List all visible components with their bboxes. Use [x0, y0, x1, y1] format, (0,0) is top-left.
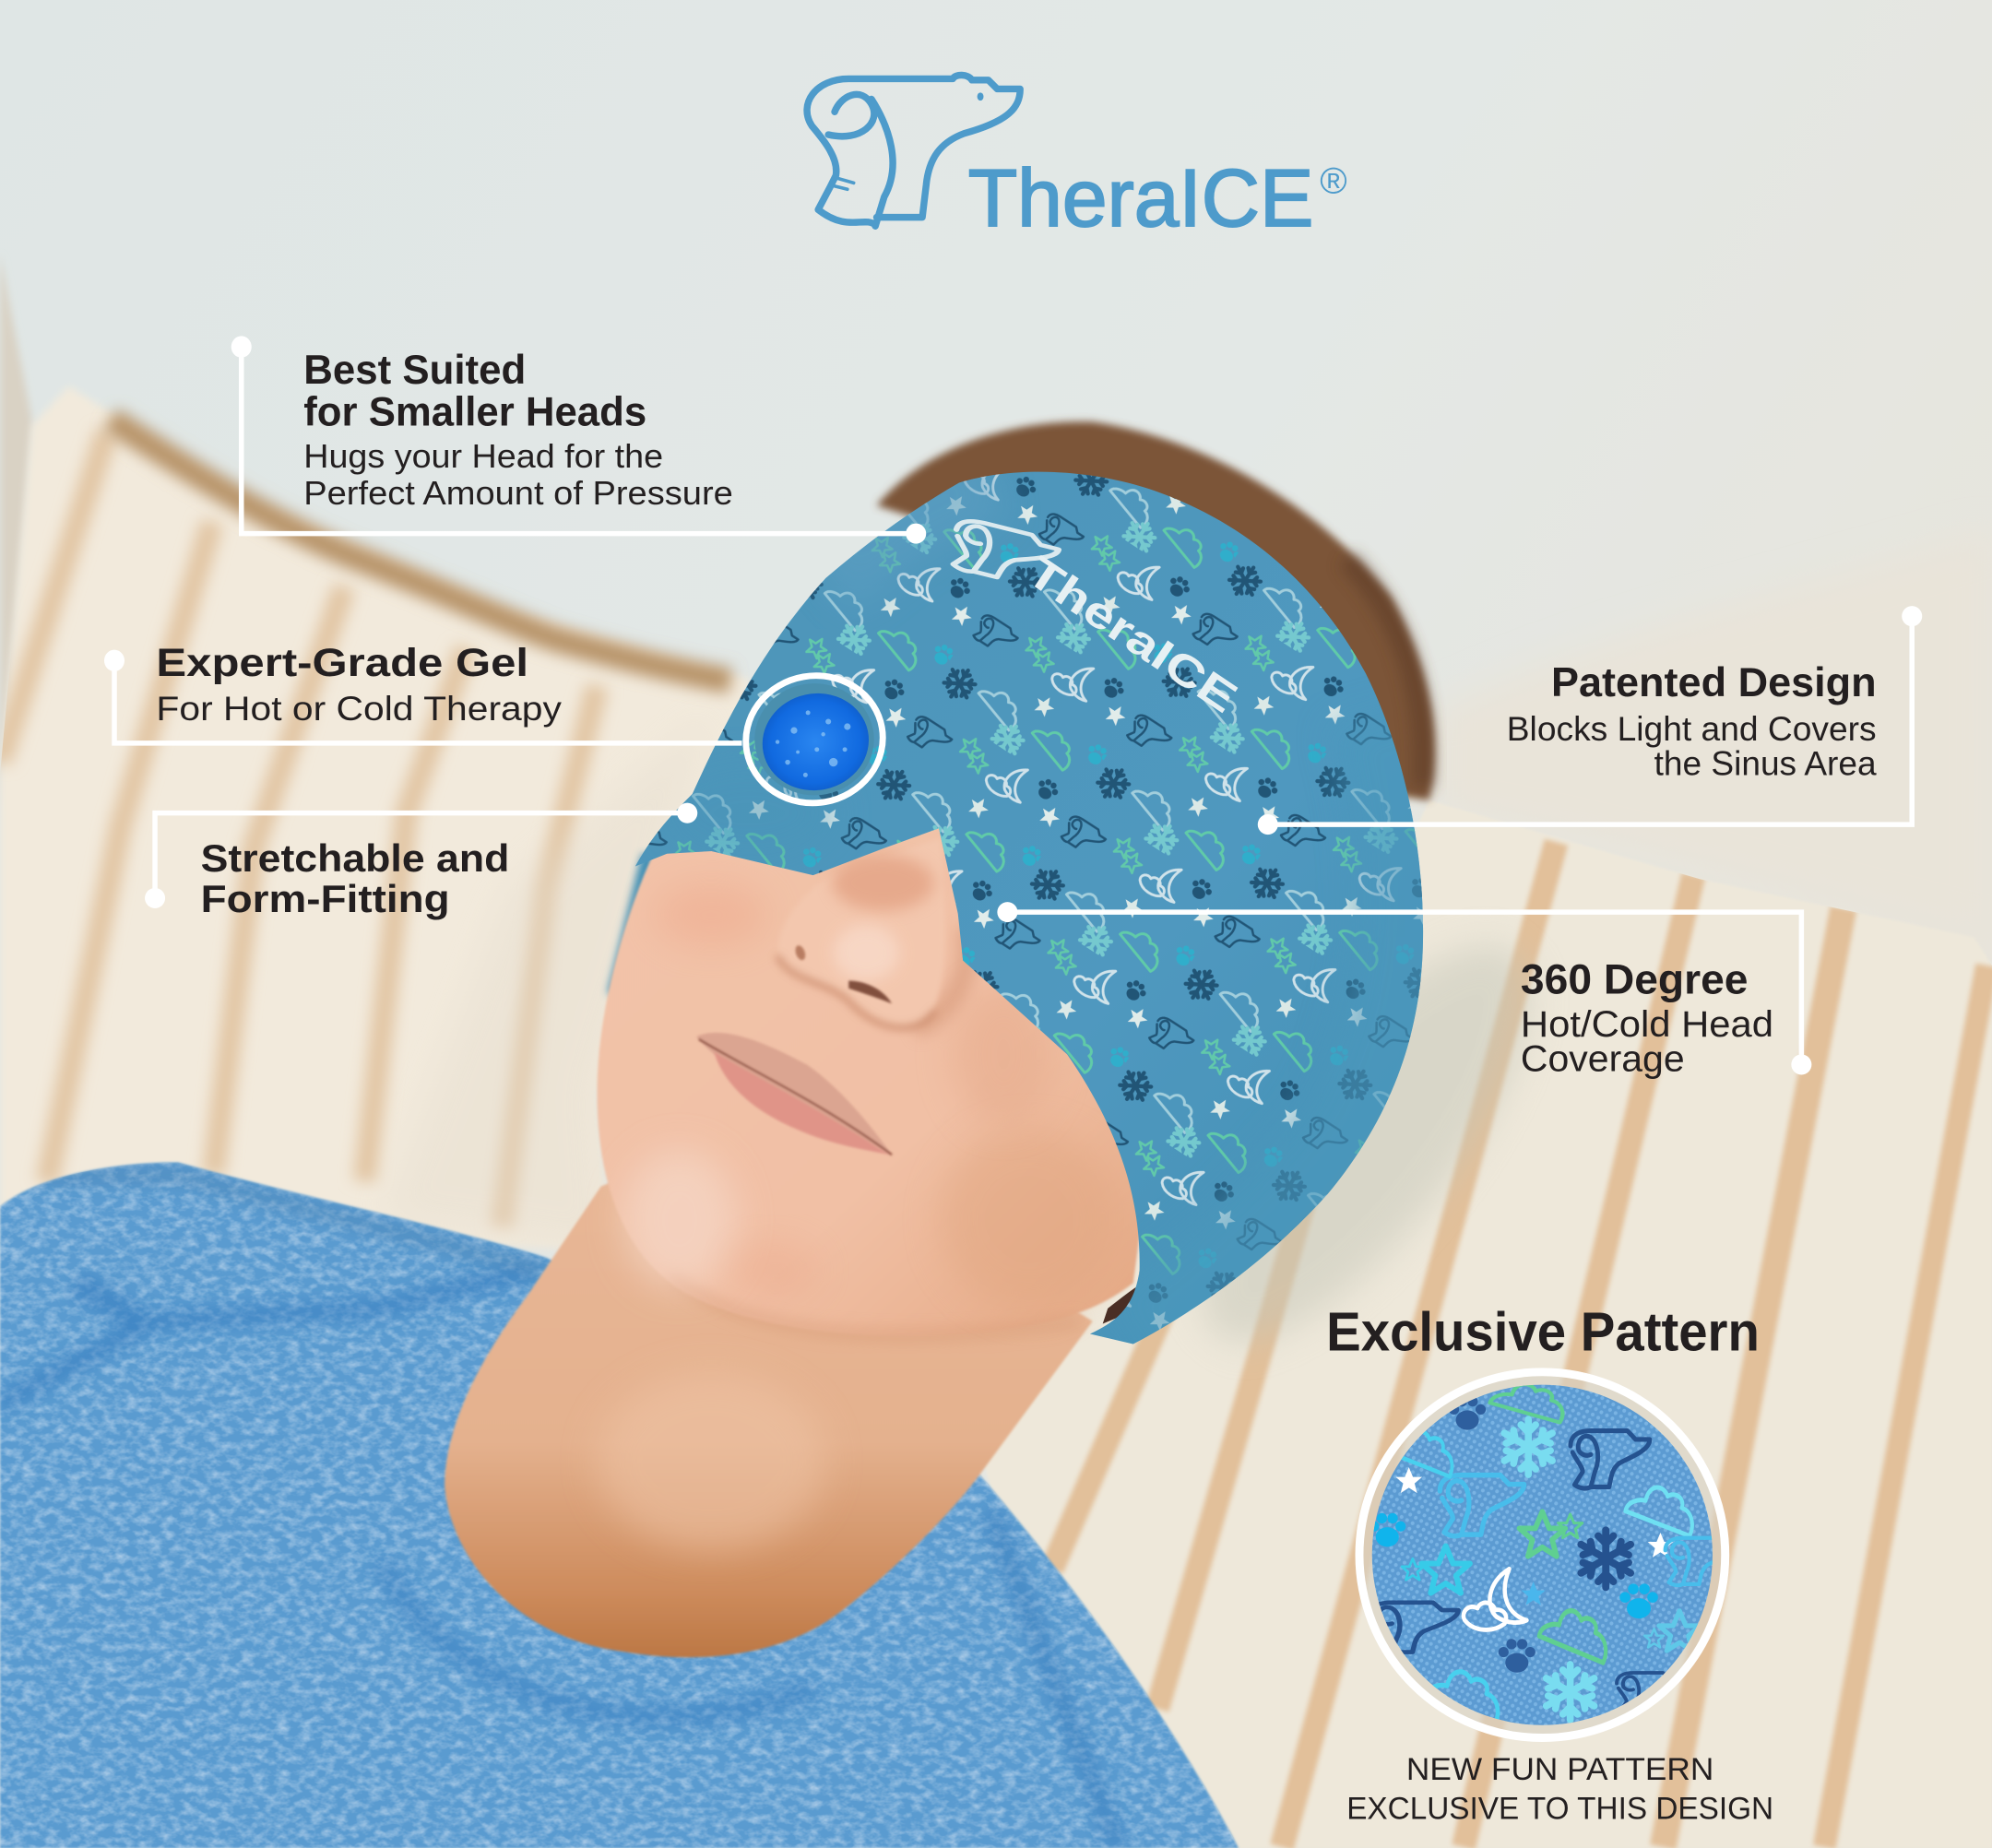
callout: patented design: Blocks Light and Covers — [1507, 709, 1877, 748]
pattern detail circle — [1359, 1372, 1735, 1738]
callout: 360 degree: 360 Degree — [1521, 955, 1749, 1002]
callout: expert-grade gel: For Hot or Cold Therapy — [156, 689, 562, 728]
icon: polar bear — [807, 75, 1020, 226]
callout: patented design: the Sinus Area — [1654, 743, 1877, 782]
callout: expert-grade gel — [104, 641, 741, 743]
callout: expert-grade gel: Expert-Grade Gel — [156, 641, 528, 685]
callout: best suited for smaller heads: Best Suited — [303, 348, 526, 393]
callout: best suited for smaller heads — [231, 336, 926, 544]
face — [597, 813, 1144, 1336]
brand logo: ® — [1320, 160, 1347, 201]
callout: best suited for smaller heads: for Smaller Heads — [303, 390, 646, 435]
callout: best suited for smaller heads: Perfect Amount of Pressure — [303, 475, 733, 512]
nose — [777, 838, 967, 1029]
callout: patented design — [1258, 606, 1922, 835]
neck — [445, 1118, 1093, 1657]
callout: stretchable and form-fitting: Form-Fitting — [201, 878, 450, 920]
callout: best suited for smaller heads: Hugs your Head for the — [303, 438, 663, 475]
pattern caption — [1346, 1752, 1773, 1827]
pattern caption: NEW FUN PATTERN — [1406, 1752, 1713, 1787]
callout: 360 degree: Coverage — [1521, 1038, 1685, 1079]
lips — [696, 1033, 892, 1155]
logo on wrap — [947, 516, 1246, 722]
blue t-shirt — [0, 1143, 1271, 1848]
wordmark: TheraICE — [968, 152, 1313, 243]
brand logo — [807, 75, 1347, 243]
right pillow — [966, 800, 1992, 1848]
callout: 360 degree — [997, 902, 1811, 1079]
callout: patented design: Patented Design — [1551, 660, 1877, 705]
gel head wrap with pattern — [634, 472, 1424, 1345]
callout: stretchable and form-fitting — [145, 803, 697, 920]
callout: stretchable and form-fitting: Stretchable and — [201, 837, 509, 880]
heading: exclusive pattern: Exclusive Pattern — [1326, 1300, 1760, 1362]
pattern caption: EXCLUSIVE TO THIS DESIGN — [1346, 1792, 1773, 1827]
hair — [877, 421, 1434, 800]
logo on wrap: TheraICE — [1019, 547, 1246, 722]
icon: gel window — [736, 665, 893, 814]
left pillow — [0, 386, 750, 1251]
callout: 360 degree: Hot/Cold Head — [1521, 1004, 1773, 1045]
mask back band — [607, 854, 724, 996]
ear — [1103, 1285, 1138, 1323]
